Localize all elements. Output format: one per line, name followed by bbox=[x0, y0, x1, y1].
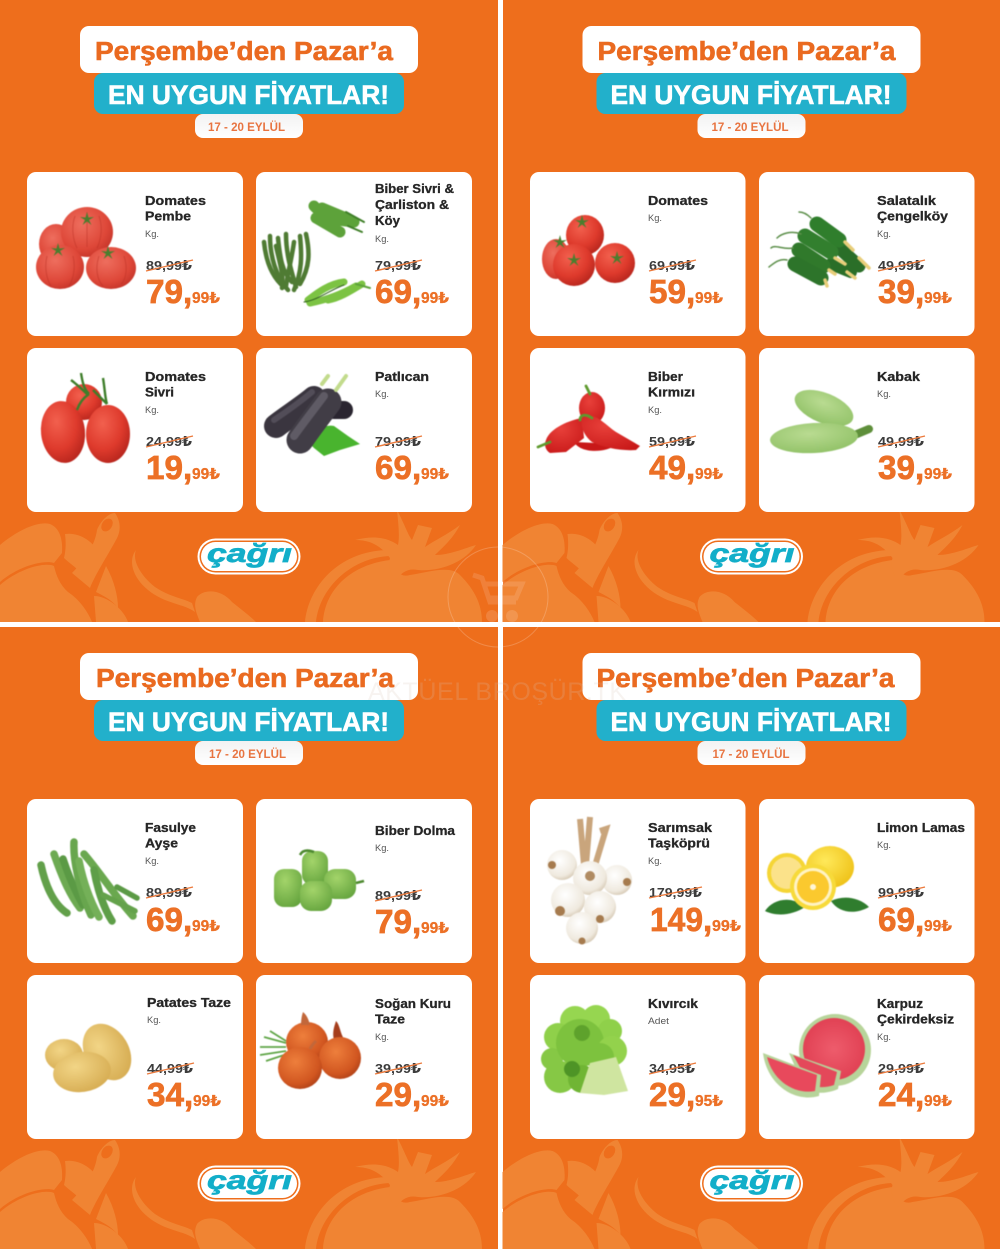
icon: green beans bbox=[41, 842, 137, 921]
unit: Adet bbox=[648, 1016, 670, 1026]
old price: 79,99₺ bbox=[375, 434, 421, 449]
old price: 49,99₺ bbox=[878, 258, 924, 273]
unit: Kg. bbox=[877, 840, 891, 850]
price: 99₺ bbox=[421, 1093, 449, 1110]
card: Karpuz Çekirdeksiz bbox=[759, 975, 974, 1139]
price: , bbox=[183, 273, 192, 310]
product name: Sivri bbox=[145, 386, 174, 400]
icon: lettuce bbox=[541, 1005, 628, 1095]
product name: Kırmızı bbox=[648, 386, 695, 400]
price bbox=[146, 273, 220, 310]
price: 69 bbox=[146, 901, 183, 938]
unit: Kg. bbox=[877, 1032, 891, 1042]
card: Biber Kırmızı bbox=[530, 348, 746, 512]
price: , bbox=[686, 1076, 695, 1113]
unit: Kg. bbox=[877, 229, 891, 239]
price: 99₺ bbox=[421, 290, 449, 307]
icon: zucchini bbox=[769, 382, 869, 455]
icon: eggplants bbox=[274, 376, 360, 456]
price: 59 bbox=[649, 273, 686, 310]
icon: onions bbox=[260, 1012, 361, 1089]
unit: Kg. bbox=[145, 856, 159, 866]
old price: 89,99₺ bbox=[146, 258, 192, 273]
header: EN UYGUN FİYATLAR! bbox=[610, 80, 892, 110]
product name bbox=[375, 182, 454, 228]
card: Kabak bbox=[759, 348, 974, 512]
price: 99₺ bbox=[924, 1093, 952, 1110]
product name: Sarımsak bbox=[648, 821, 712, 835]
logo: çağrı bbox=[207, 538, 292, 568]
product name: Taşköprü bbox=[648, 836, 710, 850]
unit: Kg. bbox=[375, 843, 389, 853]
icon: garlic bbox=[547, 817, 632, 944]
icon: red peppers bbox=[538, 386, 640, 453]
icon: lemons bbox=[765, 846, 869, 914]
price bbox=[375, 273, 449, 310]
product name bbox=[145, 370, 206, 400]
product name: Biber bbox=[648, 370, 683, 384]
price bbox=[649, 273, 723, 310]
header: 17 - 20 EYLÜL bbox=[712, 119, 788, 134]
old price: 69,99₺ bbox=[649, 258, 695, 273]
card: Biber Dolma bbox=[256, 799, 472, 963]
price: 39 bbox=[878, 449, 915, 486]
price: 39 bbox=[878, 273, 915, 310]
price: , bbox=[412, 1076, 421, 1113]
unit: Kg. bbox=[648, 213, 662, 223]
price bbox=[375, 903, 449, 940]
icon: cucumbers bbox=[769, 212, 869, 286]
price: , bbox=[686, 449, 695, 486]
price bbox=[878, 273, 952, 310]
price: 95₺ bbox=[695, 1093, 723, 1110]
background vegetable motif bbox=[502, 1137, 984, 1249]
logo: çağrı bbox=[710, 1165, 794, 1195]
icon: plum tomatoes bbox=[38, 373, 130, 465]
old price: 34,95₺ bbox=[649, 1061, 695, 1076]
unit: Kg. bbox=[145, 229, 159, 239]
price: 34 bbox=[147, 1076, 185, 1113]
icon: watermelon bbox=[763, 1014, 871, 1098]
price: , bbox=[915, 1076, 924, 1113]
price: 99₺ bbox=[192, 918, 220, 935]
price bbox=[146, 901, 220, 938]
price bbox=[147, 1076, 221, 1113]
card: Kıvırcık bbox=[530, 975, 746, 1139]
price: , bbox=[184, 1076, 193, 1113]
price: , bbox=[686, 273, 695, 310]
header bbox=[80, 26, 418, 138]
card: Patates Taze bbox=[27, 975, 243, 1139]
panel: bottom left bbox=[0, 627, 498, 1249]
price: 79 bbox=[375, 903, 412, 940]
price bbox=[146, 449, 220, 486]
product name: Karpuz bbox=[877, 997, 923, 1011]
card: Limon Lamas bbox=[759, 799, 974, 963]
product name: Domates bbox=[648, 194, 708, 208]
product name: Domates bbox=[145, 194, 206, 208]
card: Patlıcan bbox=[256, 348, 472, 512]
product name: Soğan Kuru bbox=[375, 997, 451, 1011]
background vegetable motif bbox=[0, 1137, 482, 1249]
header bbox=[582, 653, 920, 765]
product name: Limon Lamas bbox=[877, 821, 965, 835]
icon: potatoes bbox=[45, 1015, 141, 1096]
price: 19 bbox=[146, 449, 183, 486]
price: 99₺ bbox=[192, 466, 220, 483]
header bbox=[80, 653, 418, 765]
old price: 44,99₺ bbox=[147, 1061, 193, 1076]
product name bbox=[877, 997, 954, 1026]
panel: top left bbox=[0, 0, 498, 622]
product name bbox=[648, 821, 712, 850]
old price: 99,99₺ bbox=[878, 885, 924, 900]
old price: 89,99₺ bbox=[375, 888, 421, 903]
unit: Kg. bbox=[145, 405, 159, 415]
header: EN UYGUN FİYATLAR! bbox=[610, 707, 892, 737]
product name bbox=[145, 194, 206, 224]
product name bbox=[375, 997, 451, 1026]
header: EN UYGUN FİYATLAR! bbox=[108, 80, 389, 110]
old price: 59,99₺ bbox=[649, 434, 695, 449]
watermark: AKTÜEL BROŞÜR.TK bbox=[368, 678, 626, 706]
price bbox=[878, 1076, 952, 1113]
product name: Ayşe bbox=[145, 836, 178, 850]
product name: Çarliston & bbox=[375, 198, 449, 212]
price bbox=[649, 1076, 723, 1113]
price bbox=[878, 901, 952, 938]
price: 24 bbox=[878, 1076, 916, 1113]
old price: 89,99₺ bbox=[146, 885, 192, 900]
price: 99₺ bbox=[193, 1093, 221, 1110]
panel: top right bbox=[502, 0, 1000, 622]
product name: Kıvırcık bbox=[648, 997, 698, 1011]
logo bbox=[700, 538, 803, 574]
header: EN UYGUN FİYATLAR! bbox=[108, 707, 389, 737]
product name: Domates bbox=[145, 370, 206, 384]
old price: 79,99₺ bbox=[375, 258, 421, 273]
price: 99₺ bbox=[695, 466, 723, 483]
header: Perşembe’den Pazar’a bbox=[598, 38, 896, 66]
price bbox=[375, 449, 449, 486]
logo bbox=[700, 1165, 803, 1202]
product name: Kabak bbox=[877, 370, 920, 384]
product name: Salatalık bbox=[877, 194, 936, 208]
product name: Çekirdeksiz bbox=[877, 1012, 954, 1026]
unit: Kg. bbox=[877, 389, 891, 399]
price: 99₺ bbox=[695, 290, 723, 307]
header bbox=[582, 26, 920, 138]
card: Salatalık Çengelköy bbox=[759, 172, 974, 336]
unit: Kg. bbox=[147, 1015, 161, 1025]
product name: Biber Dolma bbox=[375, 824, 456, 838]
product name: Patlıcan bbox=[375, 370, 429, 384]
price: 79 bbox=[146, 273, 183, 310]
price: 149 bbox=[650, 901, 703, 938]
logo: çağrı bbox=[207, 1165, 292, 1195]
product name: Biber Sivri & bbox=[375, 182, 454, 196]
price: 69 bbox=[375, 273, 412, 310]
old price: 49,99₺ bbox=[878, 434, 924, 449]
price bbox=[650, 901, 741, 938]
card: Fasulye Ayşe bbox=[27, 799, 243, 963]
header: Perşembe’den Pazar’a bbox=[96, 665, 395, 693]
old price: 179,99₺ bbox=[649, 885, 702, 900]
price: 99₺ bbox=[924, 290, 952, 307]
logo: çağrı bbox=[710, 538, 794, 568]
price: , bbox=[412, 449, 421, 486]
price bbox=[878, 449, 952, 486]
price: , bbox=[915, 449, 924, 486]
price: , bbox=[915, 901, 924, 938]
icon: bell peppers bbox=[274, 851, 364, 911]
product name bbox=[877, 194, 948, 224]
price: 99₺ bbox=[924, 466, 952, 483]
card: Biber Sivri Çarliston Köy bbox=[256, 172, 472, 336]
icon: pink tomatoes bbox=[36, 207, 136, 289]
price: 29 bbox=[649, 1076, 686, 1113]
unit: Kg. bbox=[375, 234, 389, 244]
card: Soğan Kuru Taze bbox=[256, 975, 472, 1139]
logo bbox=[198, 1165, 300, 1202]
price: 69 bbox=[878, 901, 915, 938]
unit: Kg. bbox=[375, 1032, 389, 1042]
header: 17 - 20 EYLÜL bbox=[712, 746, 790, 761]
price: 99₺ bbox=[712, 918, 741, 935]
old price: 24,99₺ bbox=[146, 434, 192, 449]
product name: Çengelköy bbox=[877, 210, 948, 224]
price: , bbox=[915, 273, 924, 310]
old price: 29,99₺ bbox=[878, 1061, 924, 1076]
price: , bbox=[703, 901, 712, 938]
product name: Pembe bbox=[145, 210, 191, 224]
price: , bbox=[183, 449, 192, 486]
unit: Kg. bbox=[375, 389, 389, 399]
product name bbox=[145, 821, 196, 850]
price: , bbox=[412, 273, 421, 310]
product name: Patates Taze bbox=[147, 996, 231, 1010]
price bbox=[649, 449, 723, 486]
unit: Kg. bbox=[648, 856, 662, 866]
product name: Fasulye bbox=[145, 821, 196, 835]
card: Domates Sivri bbox=[27, 348, 243, 512]
price: 29 bbox=[375, 1076, 412, 1113]
watermark bbox=[368, 547, 626, 706]
price: 99₺ bbox=[421, 466, 449, 483]
price bbox=[375, 1076, 449, 1113]
icon: tomatoes bbox=[542, 215, 635, 286]
card: Sarımsak Taşköprü bbox=[530, 799, 746, 963]
card: Domates bbox=[530, 172, 746, 336]
price: , bbox=[183, 901, 192, 938]
background vegetable motif bbox=[0, 510, 482, 622]
old price: 39,99₺ bbox=[375, 1061, 421, 1076]
unit: Kg. bbox=[648, 405, 662, 415]
background vegetable motif bbox=[502, 510, 984, 622]
price: 69 bbox=[375, 449, 412, 486]
price: 99₺ bbox=[421, 920, 449, 937]
header: Perşembe’den Pazar’a bbox=[596, 665, 895, 693]
panel: bottom right bbox=[502, 627, 1000, 1249]
price: 49 bbox=[649, 449, 686, 486]
logo bbox=[198, 538, 300, 574]
product name bbox=[648, 370, 695, 400]
product name: Taze bbox=[375, 1012, 405, 1026]
card: Domates Pembe bbox=[27, 172, 243, 336]
icon: green peppers bbox=[264, 206, 370, 303]
header: Perşembe’den Pazar’a bbox=[95, 38, 394, 66]
price: 99₺ bbox=[192, 290, 220, 307]
price: 99₺ bbox=[924, 918, 952, 935]
header: 17 - 20 EYLÜL bbox=[208, 119, 285, 134]
product name: Köy bbox=[375, 214, 400, 228]
price: , bbox=[412, 903, 421, 940]
header: 17 - 20 EYLÜL bbox=[209, 746, 286, 761]
